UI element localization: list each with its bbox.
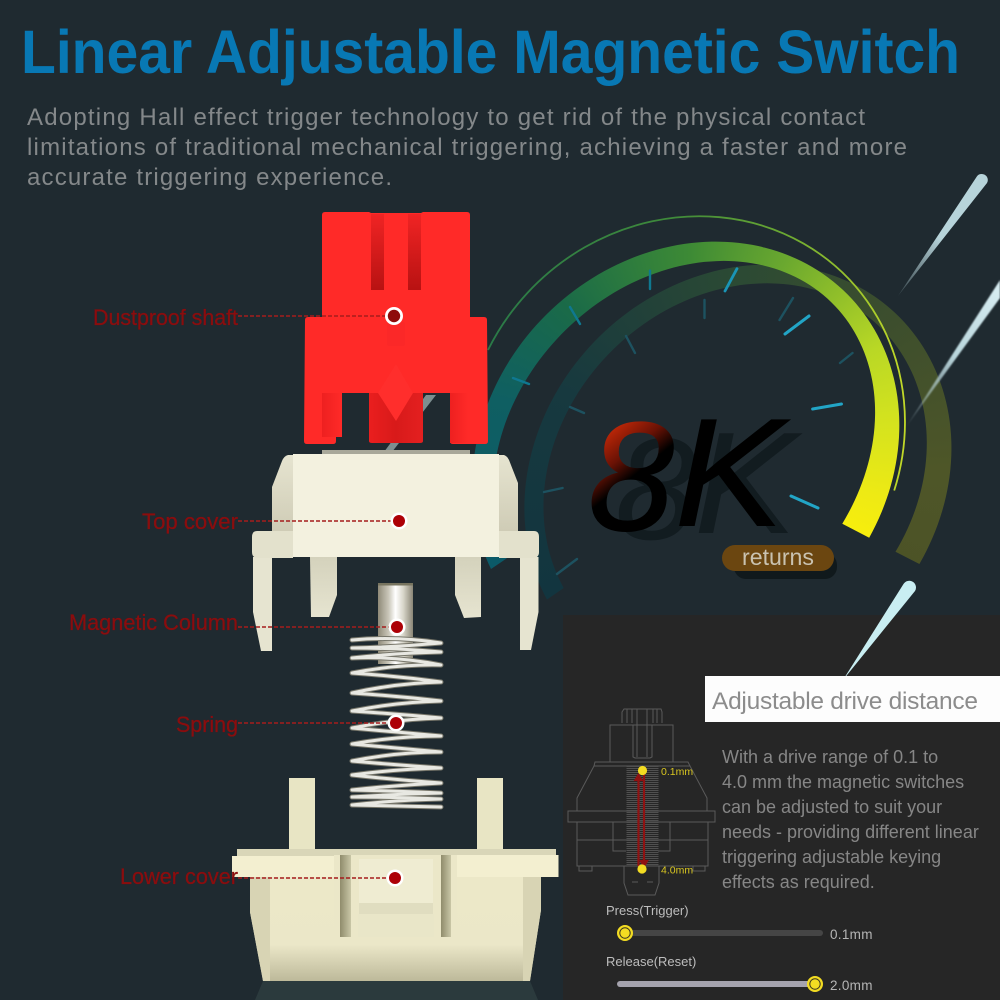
callout labels: Dustproof shaft [93,305,238,330]
panel body text: 4.0 mm the magnetic switches [722,772,964,792]
stem slot [371,214,421,290]
callout dots [385,307,408,886]
title: Linear Adjustable Magnetic Switch [21,18,960,86]
panel heading [705,676,1000,722]
press trigger slider: Press(Trigger) [606,903,689,918]
comet streak 1 [898,174,988,296]
8K shadow [615,402,804,570]
magnetic column [378,583,413,664]
centre recess [334,855,457,937]
panel body text: effects as required. [722,872,875,892]
press trigger slider: 0.1mm [830,927,873,942]
travel arrows [636,774,647,866]
callout labels: Spring [176,712,238,737]
panel body text: needs - providing different linear [722,822,979,842]
press trigger slider [606,903,873,942]
panel heading: Adjustable drive distance [712,688,978,715]
panel body text [722,747,979,892]
8K shadow: K [694,402,804,564]
outer clip legs [253,557,272,651]
panel body text: With a drive range of 0.1 to [722,747,938,767]
diamond [378,364,413,421]
travel markers [637,766,693,876]
panel body text: triggering adjustable keying [722,847,941,867]
intro paragraph [27,104,907,191]
small tab [387,322,405,346]
stem rib [384,213,408,290]
intro paragraph: accurate triggering experience. [27,164,392,191]
top cover [252,450,539,651]
front face [293,454,499,557]
travel markers: 0.1mm [661,766,693,778]
switch outline diagram [568,709,715,895]
comet streak 2 [906,280,1000,427]
release reset slider: 2.0mm [830,978,873,993]
back gauge arc [524,264,952,600]
centre block [359,859,433,937]
spring hatch [626,766,658,866]
8K headline: K [674,386,792,559]
comet streak 3 [843,581,916,680]
callout labels: Magnetic Column [69,610,238,635]
speedometer gauge bands [474,242,952,600]
intro paragraph: limitations of traditional mechanical triggering, achieving a faster and more [27,134,907,161]
returns badge [722,544,837,579]
release reset slider: Release(Reset) [606,954,696,969]
release reset slider [606,954,873,993]
intro paragraph: Adopting Hall effect trigger technology to get rid of the physical contact [27,104,865,131]
8K headline [588,386,792,563]
posts [289,778,315,854]
travel markers: 4.0mm [661,864,693,876]
dustproof shaft (red stem) [304,212,488,444]
gauge tick marks [513,269,852,574]
leader lines [238,316,391,878]
flanges [232,856,334,877]
callout labels [69,305,238,889]
lower cover [232,778,558,1000]
callout labels: Top cover [142,509,238,534]
centre column [369,393,423,443]
inner clip legs [310,557,337,617]
main gauge arc [474,242,900,569]
8K shadow: 8 [615,408,696,570]
callout labels: Lower cover [120,864,238,889]
grey streak behind shaft [384,395,436,452]
8K headline: 8 [588,390,674,563]
flanges [252,531,293,558]
panel body text: can be adjusted to suit your [722,797,942,817]
spring [352,639,441,807]
thin gauge arc [488,216,905,490]
returns badge: returns [742,544,814,570]
shadow under cover [255,981,538,1000]
panel: adjustable drive distance [563,581,1000,1000]
